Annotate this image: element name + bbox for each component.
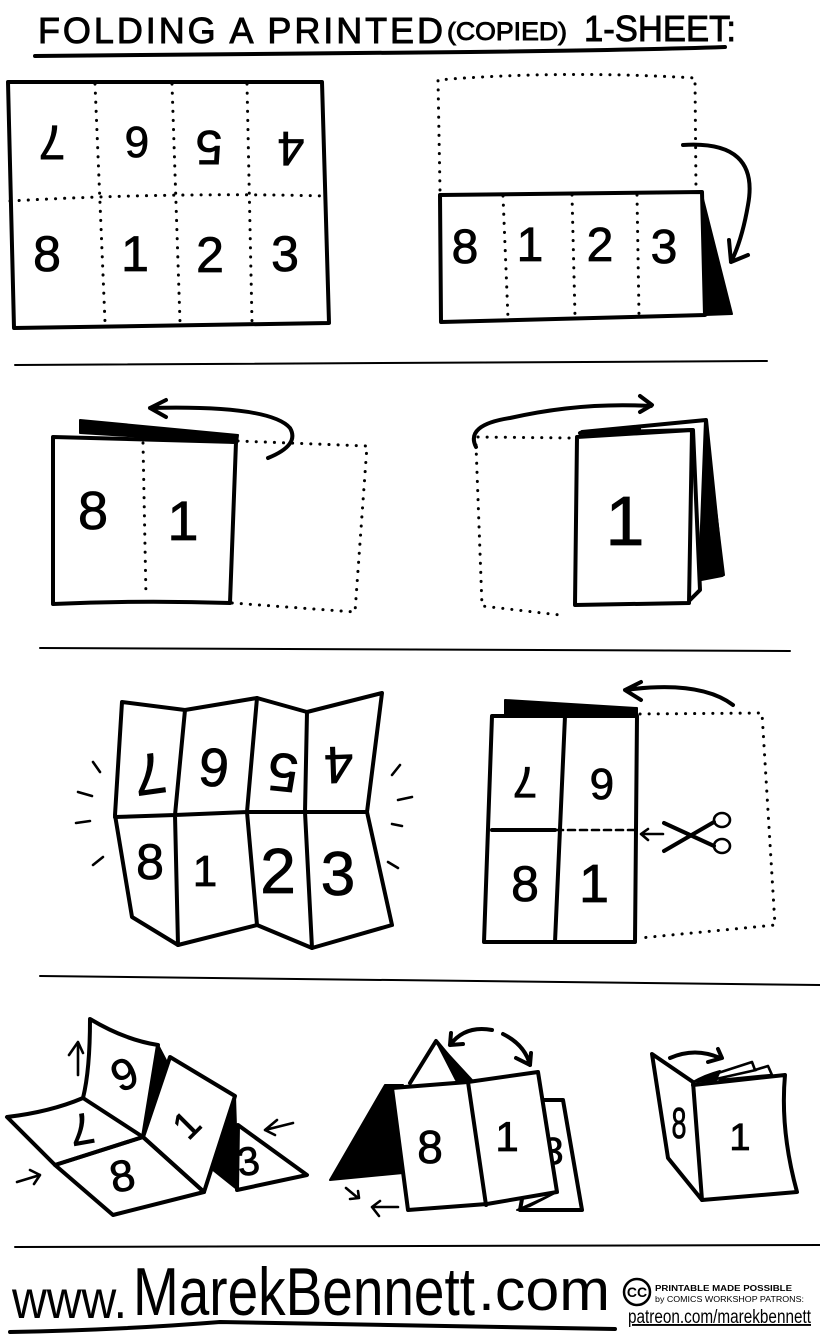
footer url: .com bbox=[478, 1258, 610, 1323]
footer url bbox=[10, 1254, 615, 1332]
title: 1-SHEET: bbox=[584, 8, 736, 49]
panel: step 8 fold into booklet: 1 bbox=[495, 1113, 519, 1160]
panel: step 3 fold over left: 1 bbox=[167, 489, 199, 552]
arrow: fold right bbox=[474, 396, 652, 447]
panel: step 2 fold in half lengthwise: 3 bbox=[651, 221, 677, 274]
icon: cc bbox=[624, 1279, 650, 1305]
panel: step 1 unfolded sheet: 3 bbox=[271, 226, 299, 282]
credit block: by COMICS WORKSHOP PATRONS: bbox=[655, 1295, 804, 1304]
credit block bbox=[624, 1279, 812, 1328]
arrow: fold left bbox=[625, 682, 733, 705]
panel: step 5 zigzag unfolded sheet: 3 bbox=[321, 840, 355, 909]
panel: step 5 zigzag unfolded sheet: 7 bbox=[129, 739, 170, 808]
panel: step 7 push sheet together: 7 bbox=[65, 1102, 98, 1155]
footer url: MarekBennett bbox=[133, 1254, 475, 1330]
panel: step 6 fold and cut: 7 bbox=[513, 757, 537, 806]
panel: step 7 push sheet together: 3 bbox=[234, 1139, 262, 1185]
panel: step 5 zigzag unfolded sheet: 6 bbox=[196, 736, 232, 798]
arrow: turn page bbox=[670, 1049, 722, 1062]
panel: step 6 fold and cut: 1 bbox=[579, 854, 609, 914]
panel: step 8 fold into booklet: 3 bbox=[542, 1131, 564, 1173]
arrows: push directions bbox=[17, 1042, 293, 1184]
panel: step 4 fold over right bbox=[474, 396, 724, 615]
arrows: fold around bbox=[450, 1029, 531, 1065]
panel: step 5 zigzag unfolded sheet bbox=[76, 693, 412, 948]
panel: step 5 zigzag unfolded sheet: 4 bbox=[323, 735, 354, 793]
panel: step 1 unfolded sheet: 7 bbox=[39, 115, 65, 168]
panel: step 1 unfolded sheet: 6 bbox=[125, 117, 149, 166]
panel: step 1 unfolded sheet: 5 bbox=[196, 120, 222, 173]
panel: step 1 unfolded sheet: 1 bbox=[121, 226, 149, 282]
panel: step 2 fold in half lengthwise: 1 bbox=[517, 219, 543, 272]
title: FOLDING A PRINTED bbox=[38, 10, 443, 51]
panel: step 1 unfolded sheet: 4 bbox=[278, 121, 304, 174]
panel: step 7 push sheet together: 8 bbox=[105, 1150, 139, 1203]
panel: step 4 fold over right: 1 bbox=[606, 482, 644, 560]
footer url: www. bbox=[11, 1270, 127, 1330]
burst marks bbox=[76, 762, 412, 868]
panel: step 7 push sheet together bbox=[7, 1019, 307, 1215]
panel: step 9 finished booklet: 1 bbox=[729, 1117, 751, 1159]
panel: step 1 unfolded sheet: 8 bbox=[33, 226, 61, 282]
panel: step 3 fold over left: 8 bbox=[78, 481, 108, 541]
icon: cc: CC bbox=[627, 1284, 647, 1300]
title bbox=[35, 8, 736, 56]
panel: step 1 unfolded sheet bbox=[8, 82, 329, 328]
panel: step 5 zigzag unfolded sheet: 1 bbox=[193, 847, 217, 896]
arrow: fold down bbox=[683, 145, 750, 262]
panel: step 6 fold and cut bbox=[484, 682, 775, 942]
panel: step 6 fold and cut: 6 bbox=[590, 759, 614, 808]
panel: step 6 fold and cut: 8 bbox=[511, 856, 539, 912]
panel: step 7 push sheet together: 1 bbox=[165, 1103, 210, 1148]
panel: step 8 fold into booklet: 8 bbox=[417, 1121, 443, 1173]
panel: step 9 finished booklet bbox=[652, 1049, 797, 1200]
panel: step 1 unfolded sheet: 2 bbox=[196, 227, 224, 283]
panel: step 2 fold in half lengthwise: 2 bbox=[587, 219, 613, 272]
panel: step 8 fold into booklet bbox=[330, 1029, 582, 1216]
title: (COPIED) bbox=[447, 18, 567, 46]
panel: step 2 fold in half lengthwise: 8 bbox=[452, 221, 478, 274]
panel: step 5 zigzag unfolded sheet: 8 bbox=[136, 834, 164, 890]
panel: step 9 finished booklet: 8 bbox=[672, 1099, 686, 1148]
icon: scissors bbox=[664, 813, 730, 853]
arrow: fold left bbox=[150, 400, 292, 458]
section dividers bbox=[15, 361, 820, 1247]
credit block: PRINTABLE MADE POSSIBLE bbox=[655, 1284, 793, 1293]
arrow: cut direction bbox=[641, 829, 663, 840]
panel: step 7 push sheet together: 6 bbox=[103, 1046, 146, 1101]
panel: step 2 fold in half lengthwise bbox=[438, 74, 750, 322]
panel: step 5 zigzag unfolded sheet: 5 bbox=[265, 741, 301, 803]
panel: step 5 zigzag unfolded sheet: 2 bbox=[260, 835, 296, 907]
panel: step 3 fold over left bbox=[53, 400, 367, 612]
